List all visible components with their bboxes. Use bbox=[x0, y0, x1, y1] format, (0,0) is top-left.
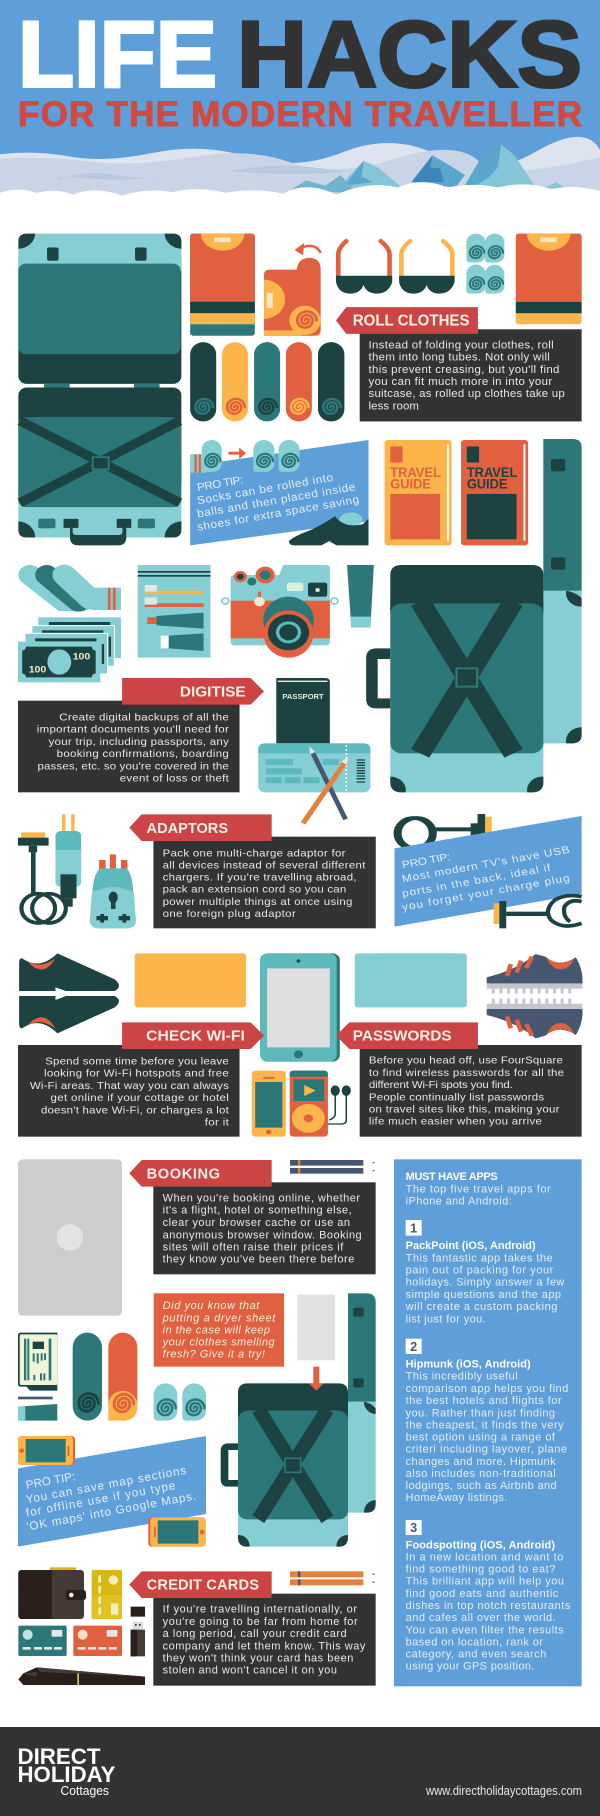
text panel: check wi-fi: for it bbox=[205, 1117, 229, 1128]
app 2: Hipmunk: you. Rather than just finding bbox=[406, 1407, 555, 1419]
text panel: passwords: Before you head off, use FourSquare bbox=[369, 1055, 563, 1066]
heading ribbon: roll clothes bbox=[336, 307, 478, 334]
text panel: digitise: your trip, including passports, any bbox=[49, 737, 229, 748]
apps intro bbox=[406, 1171, 551, 1207]
app 3: Foodspotting bbox=[406, 1520, 571, 1673]
text panel: adaptors: all devices instead of several different bbox=[163, 860, 365, 871]
app 3: Foodspotting: category, and even search bbox=[406, 1649, 546, 1661]
callout: dryer sheet bbox=[154, 1293, 284, 1367]
icon: usb cable bottom bbox=[494, 896, 582, 928]
icon: dark shoes bbox=[19, 953, 119, 1033]
app 3: Foodspotting: based on location, rank or bbox=[406, 1636, 543, 1648]
icon: travel adaptor bbox=[90, 854, 136, 928]
icon: boarding pass and pencils bbox=[258, 743, 370, 823]
icon: usb stick bbox=[131, 1607, 145, 1656]
text panel: adaptors bbox=[153, 837, 376, 928]
pro tip: map sections: for offline use if you type bbox=[25, 1479, 176, 1520]
text panel: credit cards: you're going to be far from home for bbox=[163, 1616, 358, 1628]
text panel: booking: sites will often raise their prices if bbox=[163, 1241, 344, 1253]
text panel: credit cards: stolen and won't cancel it on you bbox=[163, 1664, 337, 1676]
text panel: digitise: passes, etc. so you're covered in the bbox=[37, 761, 229, 772]
apps intro: MUST HAVE APPS bbox=[406, 1171, 498, 1183]
icon: pencils orange bbox=[290, 1571, 375, 1585]
text panel: digitise bbox=[18, 701, 240, 792]
app 1: PackPoint: PackPoint (iOS, Android) bbox=[406, 1240, 536, 1252]
text panel: digitise: event of loss or theft bbox=[120, 773, 229, 784]
section: booking and map tips bbox=[18, 1159, 376, 1547]
text panel: passwords: life much easier when you arrive bbox=[369, 1116, 542, 1127]
icon: camera bbox=[222, 565, 338, 658]
app 1: PackPoint: holidays. Simply answer a few bbox=[406, 1277, 564, 1289]
icon: belt bbox=[18, 1667, 145, 1685]
panel: must have apps bbox=[394, 1159, 582, 1686]
text panel: digitise: booking confirmations, boarding bbox=[57, 749, 229, 760]
text panel: roll clothes: less room bbox=[368, 401, 419, 412]
app 2: Hipmunk: comparison app helps you find bbox=[406, 1383, 568, 1395]
callout: dryer sheet: putting a dryer sheet bbox=[162, 1312, 276, 1324]
pro tip: socks bbox=[190, 440, 368, 545]
text panel: check wi-fi: doesn't have Wi-Fi, or charges a lot bbox=[41, 1105, 229, 1116]
heading ribbon: roll clothes: ROLL CLOTHES bbox=[353, 313, 470, 330]
text panel: check wi-fi: Wi-Fi areas. That way you can always bbox=[30, 1081, 229, 1092]
icon: travel guide yellow: GUIDE bbox=[390, 476, 431, 491]
app 3: Foodspotting: 3 bbox=[410, 1521, 417, 1535]
icon: charger bbox=[55, 814, 81, 907]
text panel: adaptors: one foreign plug adaptor bbox=[163, 909, 296, 920]
footer logo: Cottages bbox=[60, 1783, 109, 1798]
text panel: adaptors: pack an extension cord so you can bbox=[163, 884, 346, 895]
text panel: check wi-fi: looking for Wi-Fi hotspots and free bbox=[44, 1068, 229, 1079]
app 2: Hipmunk: HomeAway listings. bbox=[406, 1492, 507, 1504]
icon: passport: PASSPORT bbox=[282, 692, 324, 701]
callout: dryer sheet: Did you know that bbox=[163, 1300, 260, 1312]
header banner bbox=[0, 0, 600, 214]
text panel: credit cards: they won't think your card has been bbox=[163, 1652, 353, 1664]
text panel: passwords: People continually list passwords bbox=[369, 1092, 544, 1103]
pro tip: map sections bbox=[18, 1436, 206, 1547]
icon: phone landscape bottom bbox=[148, 1517, 206, 1547]
icon: travel guide orange: GUIDE bbox=[467, 476, 507, 491]
pro tip: map sections: 'OK maps' into Google Maps. bbox=[26, 1489, 197, 1534]
heading ribbon: credit cards bbox=[129, 1571, 272, 1598]
icon: banknotes: 100 bbox=[29, 665, 47, 675]
app 3: Foodspotting: find something good to eat? bbox=[406, 1564, 555, 1576]
app 2: Hipmunk: Hipmunk (iOS, Android) bbox=[406, 1358, 531, 1370]
text panel: digitise: Create digital backups of all the bbox=[59, 712, 229, 723]
mountains bbox=[289, 145, 566, 193]
app 2: Hipmunk: the cheapest, it finds the very bbox=[406, 1419, 564, 1431]
heading ribbon: check wi-fi bbox=[122, 1022, 264, 1049]
icon: laptop bbox=[18, 1159, 122, 1316]
text panel: roll clothes: you can fit much more in into your bbox=[368, 376, 552, 388]
pro tip: usb ports: ports in the back, ideal if bbox=[401, 862, 553, 900]
icon: sock to balls bbox=[190, 440, 300, 473]
text panel: booking: When you're booking online, whether bbox=[163, 1193, 360, 1205]
pro tip: socks: PRO TIP: bbox=[196, 475, 244, 494]
icon: sneakers bbox=[487, 954, 583, 1038]
icon: travel guide orange: TRAVEL bbox=[467, 464, 518, 480]
text panel: adaptors: power multiple things at once using bbox=[163, 897, 352, 908]
app 3: Foodspotting: Foodspotting (iOS, Android) bbox=[406, 1539, 555, 1551]
text panel: check wi-fi: get online if your cottage or hotel bbox=[51, 1093, 229, 1104]
heading ribbon: passwords: PASSWORDS bbox=[353, 1029, 452, 1044]
text panel: credit cards: a long period, call your credit card bbox=[163, 1628, 347, 1640]
icon: rolled clothes row bbox=[190, 342, 344, 421]
pro tip: socks: shoes for extra space saving bbox=[196, 494, 360, 534]
icon: yellow sunglasses bbox=[399, 241, 455, 294]
text panel: roll clothes: this prevent creasing, but you'll find bbox=[368, 364, 559, 376]
title: LIFE bbox=[18, 2, 217, 106]
heading ribbon: digitise: DIGITISE bbox=[180, 685, 246, 700]
text panel: credit cards bbox=[153, 1594, 376, 1686]
callout: dryer sheet: your clothes smelling bbox=[162, 1337, 276, 1349]
app 2: Hipmunk: This incredibly useful bbox=[406, 1371, 518, 1383]
app 1: PackPoint: 1 bbox=[410, 1221, 417, 1235]
text panel: booking: clear your browser cache or use an bbox=[163, 1217, 350, 1229]
app 3: Foodspotting: find good eats and authentic bbox=[406, 1588, 559, 1600]
text panel: booking: they know you've been there before bbox=[163, 1253, 354, 1265]
text panel: passwords bbox=[360, 1045, 582, 1137]
text panel: check wi-fi: Spend some time before you leave bbox=[45, 1056, 229, 1067]
section: wi-fi and passwords bbox=[18, 953, 583, 1137]
icon: teal card bbox=[18, 1626, 67, 1656]
text panel: roll clothes: them into long tubes. Not only will bbox=[368, 352, 550, 364]
footer logo: HOLIDAY bbox=[18, 1762, 116, 1787]
title: FOR THE MODERN TRAVELLER bbox=[18, 95, 582, 134]
text panel: passwords: different Wi-Fi spots you find. bbox=[369, 1080, 513, 1091]
apps intro: The top five travel apps for bbox=[406, 1183, 551, 1195]
app 3: Foodspotting: using your GPS position. bbox=[406, 1661, 534, 1673]
icon: travel guide yellow bbox=[385, 440, 452, 545]
icon: tube bbox=[347, 565, 374, 627]
icon: light ticket bbox=[355, 953, 467, 1007]
text panel: credit cards: company and let them know. This way bbox=[163, 1640, 366, 1652]
app 1: PackPoint: will create a custom packing bbox=[405, 1301, 557, 1313]
app 2: Hipmunk: lodgings, such as Airbnb and bbox=[406, 1480, 557, 1492]
icon: music player and earphones bbox=[290, 1071, 351, 1137]
text panel: roll clothes: Instead of folding your clothes, roll bbox=[368, 340, 554, 351]
app 2: Hipmunk: also includes non-traditional bbox=[406, 1468, 556, 1480]
icon: folded shirt bbox=[190, 234, 255, 336]
icon: rolled socks pair bbox=[154, 1383, 206, 1421]
pro tip: usb ports: Most modern TV's have USB bbox=[401, 844, 571, 885]
icon: usb cable top bbox=[396, 814, 492, 849]
heading ribbon: booking bbox=[129, 1160, 272, 1187]
icon: smartphone bbox=[252, 1071, 286, 1137]
icon: yellow card bbox=[92, 1570, 122, 1619]
footer logo: DIRECT bbox=[18, 1744, 101, 1769]
icon: toiletry bag bbox=[138, 565, 210, 658]
text panel: booking bbox=[153, 1182, 376, 1274]
text panel: adaptors: chargers. If you're travelling abroad, bbox=[163, 872, 357, 883]
pro tip: map sections: You can save map sections bbox=[25, 1464, 187, 1506]
icon: yellow ticket bbox=[135, 953, 246, 1007]
icon: rolled socks bbox=[466, 234, 504, 294]
icon: banknotes: 100 bbox=[73, 652, 91, 662]
heading ribbon: digitise bbox=[122, 678, 264, 705]
callout: dryer sheet: fresh? Give it a try! bbox=[163, 1349, 265, 1361]
heading ribbon: check wi-fi: CHECK WI-FI bbox=[146, 1029, 245, 1044]
icon: charging cable bbox=[18, 832, 66, 923]
icon: guide book and tube bbox=[18, 1333, 57, 1421]
cloud and mountain scene bbox=[0, 137, 600, 214]
text panel: adaptors: Pack one multi-charge adaptor for bbox=[163, 848, 346, 859]
icon: travel guide yellow: TRAVEL bbox=[390, 464, 441, 480]
app 3: Foodspotting: In a new location and want to bbox=[406, 1551, 563, 1563]
app 2: Hipmunk bbox=[406, 1339, 568, 1504]
footer bbox=[0, 1727, 600, 1816]
heading ribbon: credit cards: CREDIT CARDS bbox=[147, 1578, 259, 1594]
heading ribbon: passwords bbox=[336, 1022, 478, 1049]
icon: shoe bbox=[289, 512, 368, 545]
text panel: booking: anonymous browser window. Booking bbox=[163, 1229, 362, 1241]
heading ribbon: booking: BOOKING bbox=[147, 1166, 220, 1182]
icon: orange card bbox=[73, 1626, 122, 1656]
callout: dryer sheet: in the case will keep bbox=[163, 1324, 270, 1336]
section: credit cards bbox=[18, 1567, 376, 1686]
app 1: PackPoint: list just for you. bbox=[406, 1313, 486, 1325]
icon: rolling shirt bbox=[264, 243, 321, 336]
pro tip: usb ports: PRO TIP: bbox=[401, 852, 452, 871]
app 2: Hipmunk: 2 bbox=[410, 1340, 417, 1354]
icon: pencils steel bbox=[290, 1160, 374, 1174]
icon: travel guide orange bbox=[461, 440, 528, 545]
app 1: PackPoint: This fantastic app takes the bbox=[406, 1252, 553, 1264]
apps intro: iPhone and Android: bbox=[406, 1195, 512, 1207]
icon: wallet bbox=[18, 1567, 86, 1619]
app 3: Foodspotting: dishes in top notch restaurants bbox=[406, 1600, 571, 1612]
pro tip: socks: Socks can be rolled into bbox=[196, 472, 334, 507]
icon: tablet bbox=[260, 953, 340, 1062]
icon: red sunglasses bbox=[336, 241, 392, 294]
pro tip: usb ports bbox=[395, 816, 582, 927]
footer logo bbox=[18, 1744, 116, 1798]
app 1: PackPoint bbox=[405, 1220, 564, 1325]
text panel: passwords: on travel sites like this, making your bbox=[369, 1104, 560, 1115]
text panel: credit cards: If you're travelling internationally, or bbox=[163, 1604, 357, 1616]
icon: socks bbox=[30, 575, 121, 610]
text panel: passwords: to find wireless passwords for all the bbox=[369, 1068, 564, 1079]
heading ribbon: adaptors bbox=[129, 814, 272, 841]
pro tip: socks: balls and then placed inside bbox=[196, 482, 356, 520]
text panel: booking: it's a flight, hotel or something else, bbox=[163, 1205, 352, 1217]
icon: open suitcase bbox=[18, 234, 181, 545]
text panel: digitise: important documents you'll need for bbox=[37, 724, 229, 735]
text panel: roll clothes: suitcase, as rolled up clothes take up bbox=[368, 388, 565, 400]
app 2: Hipmunk: criteri including layover, plane bbox=[406, 1444, 567, 1456]
app 1: PackPoint: simple questions and the app bbox=[406, 1289, 561, 1301]
app 2: Hipmunk: changes and more. Hipmunk bbox=[406, 1456, 556, 1468]
text panel: roll clothes bbox=[360, 329, 582, 421]
app 3: Foodspotting: You can even filter the results bbox=[406, 1624, 564, 1636]
icon: suitcase standing bbox=[366, 439, 582, 792]
title bbox=[18, 2, 582, 134]
icon: dryer sheet bbox=[297, 1295, 335, 1360]
pro tip: usb ports: you forget your charge plug bbox=[401, 873, 571, 913]
icon: folded shirt right bbox=[516, 234, 582, 324]
icon: suitcase with arrow bbox=[221, 1293, 376, 1547]
text panel: check wi-fi bbox=[18, 1045, 240, 1137]
app 2: Hipmunk: best option using a range of bbox=[406, 1432, 556, 1444]
heading ribbon: adaptors: ADAPTORS bbox=[147, 821, 228, 837]
section: digitise and adaptors bbox=[18, 439, 582, 928]
icon: rolled clothes pair bbox=[73, 1333, 137, 1421]
app 2: Hipmunk: the best hotels and flights for bbox=[406, 1395, 562, 1407]
icon: passport bbox=[276, 678, 330, 743]
app 3: Foodspotting: and cafes all over the world. bbox=[406, 1612, 556, 1624]
icon: phone landscape top bbox=[18, 1436, 75, 1465]
title: HACKS bbox=[237, 2, 582, 106]
app 1: PackPoint: pain out of packing for your bbox=[406, 1265, 554, 1277]
icon: banknotes bbox=[18, 617, 121, 682]
pro tip: map sections: PRO TIP: bbox=[25, 1470, 76, 1492]
section: roll clothes bbox=[18, 234, 582, 545]
app 3: Foodspotting: This brilliant app will help you bbox=[406, 1576, 564, 1588]
